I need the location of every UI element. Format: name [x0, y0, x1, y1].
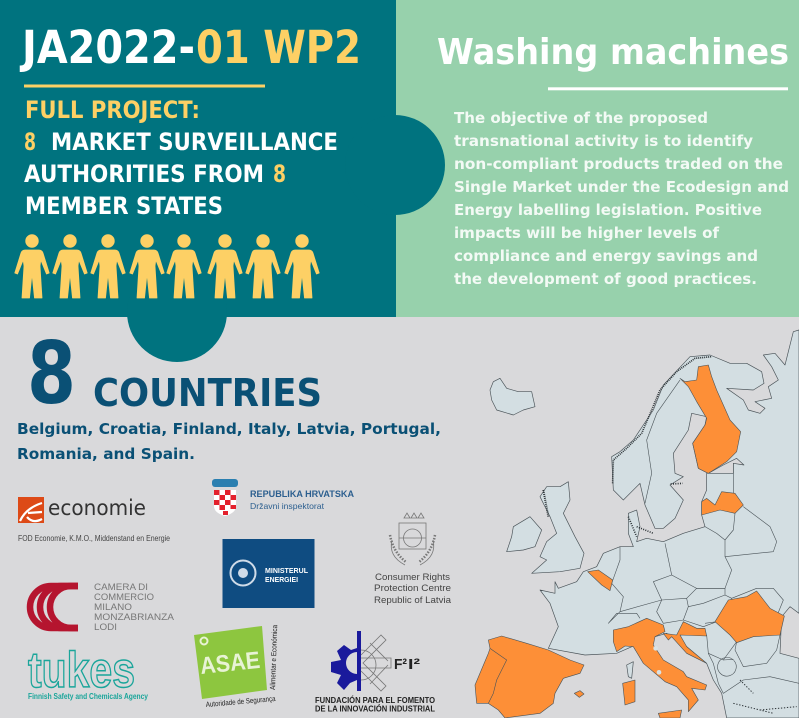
map: non-highlighted land: [490, 330, 799, 718]
text block: full project: 8: [273, 160, 286, 188]
logo: F2I2 foundation: DE LA INNOVACIÓN INDUSTRIAL: [315, 704, 435, 714]
logo: ASAE: [194, 624, 279, 709]
logo: Camera di Commercio: CAMERA DI: [94, 582, 148, 593]
logo: F2I2 foundation: [315, 631, 435, 714]
heading: 8 countries: COUNTRIES: [93, 371, 322, 415]
map: highlighted countries: [475, 365, 784, 718]
logo: ASAE: ASAE: [199, 647, 261, 680]
logo: F2I2 foundation: FUNDACIÓN PARA EL FOMENTO: [315, 696, 435, 705]
logo: tukes: tukes: [28, 642, 135, 698]
title: JA2022-01 WP2: 01 WP2: [196, 21, 361, 74]
logo: tukes: Finnish Safety and Chemicals Agency: [28, 692, 148, 701]
text block: objective: impacts will be higher levels of: [454, 224, 719, 242]
panel: washing machines green: [396, 0, 799, 317]
text block: objective: transnational activity is to identify: [454, 132, 753, 150]
logo: Camera di Commercio: [30, 582, 175, 633]
logo: Ministerul Energiei: [222, 539, 314, 608]
map: dark jagged coastlines: [543, 357, 797, 713]
logo: Latvia consumer rights: Consumer Rights: [375, 572, 450, 583]
logo: Ministerul Energiei: ENERGIEI: [265, 577, 298, 584]
logo: Croatia inspectorate: REPUBLIKA HRVATSKA: [250, 489, 354, 500]
logo: F2I2 foundation: F²: [394, 656, 407, 673]
title: JA2022-01 WP2: [19, 21, 361, 74]
map: San Marino and Vatican: [653, 646, 661, 675]
logo: F2I2 foundation: I²: [408, 656, 420, 673]
white heading underline: [548, 87, 788, 90]
text block: country list: Romania, and Spain.: [17, 445, 195, 463]
logo: Latvia consumer rights: Republic of Latvia: [374, 595, 452, 606]
logo: Latvia consumer rights: Protection Centre: [374, 583, 451, 594]
text block: full project: AUTHORITIES FROM: [24, 160, 264, 188]
logo: Camera di Commercio: LODI: [94, 622, 117, 633]
logo: economie: economie: [48, 496, 146, 520]
text block: country list: Belgium, Croatia, Finland, Italy, Latvia, Portugal,: [17, 420, 441, 438]
text block: objective: Single Market under the Ecodesign and: [454, 178, 789, 196]
map: internal borders: [608, 380, 799, 693]
title: JA2022-01 WP2: JA2022-: [19, 21, 195, 74]
logo: Ministerul Energiei: MINISTERUL: [265, 568, 309, 575]
logo: ASAE: Alimentar e Económica: [268, 624, 279, 690]
heading: 8 countries: 8: [27, 324, 76, 424]
text block: objective: the development of good practices.: [454, 270, 757, 288]
logo: economie: [18, 496, 170, 543]
logo: Croatia inspectorate: [212, 479, 354, 516]
panel: project teal: [0, 0, 445, 362]
logo: Latvia consumer rights: [374, 513, 452, 606]
text block: objective: [454, 109, 789, 288]
text block: full project: 8: [24, 128, 36, 156]
text block: full project: FULL PROJECT:: [25, 96, 200, 124]
text block: objective: non-compliant products traded on the: [454, 155, 783, 173]
logo: economie: FOD Economie, K.M.O., Middenstand en Energie: [18, 534, 170, 543]
text block: full project: [24, 96, 338, 220]
text block: objective: Energy labelling legislation. Positive: [454, 201, 762, 219]
logo: Camera di Commercio: MONZABRIANZA: [94, 612, 175, 623]
logo: Croatia inspectorate: Državni inspektorat: [250, 501, 325, 511]
yellow title underline: [24, 84, 265, 88]
logo: ASAE: Autoridade de Segurança: [205, 694, 277, 709]
text block: objective: compliance and energy savings and: [454, 247, 758, 265]
heading: 8 countries: [27, 324, 322, 424]
panel: lower grey background: [0, 317, 799, 718]
text block: full project: MEMBER STATES: [25, 192, 223, 220]
text block: full project: MARKET SURVEILLANCE: [51, 128, 338, 156]
icon: row of eight people: [15, 235, 319, 298]
text block: country list: [17, 420, 441, 463]
logo: Camera di Commercio: COMMERCIO: [94, 592, 154, 603]
logo: Camera di Commercio: MILANO: [94, 602, 132, 613]
map of Europe: [475, 330, 799, 718]
text block: objective: The objective of the proposed: [454, 109, 708, 127]
